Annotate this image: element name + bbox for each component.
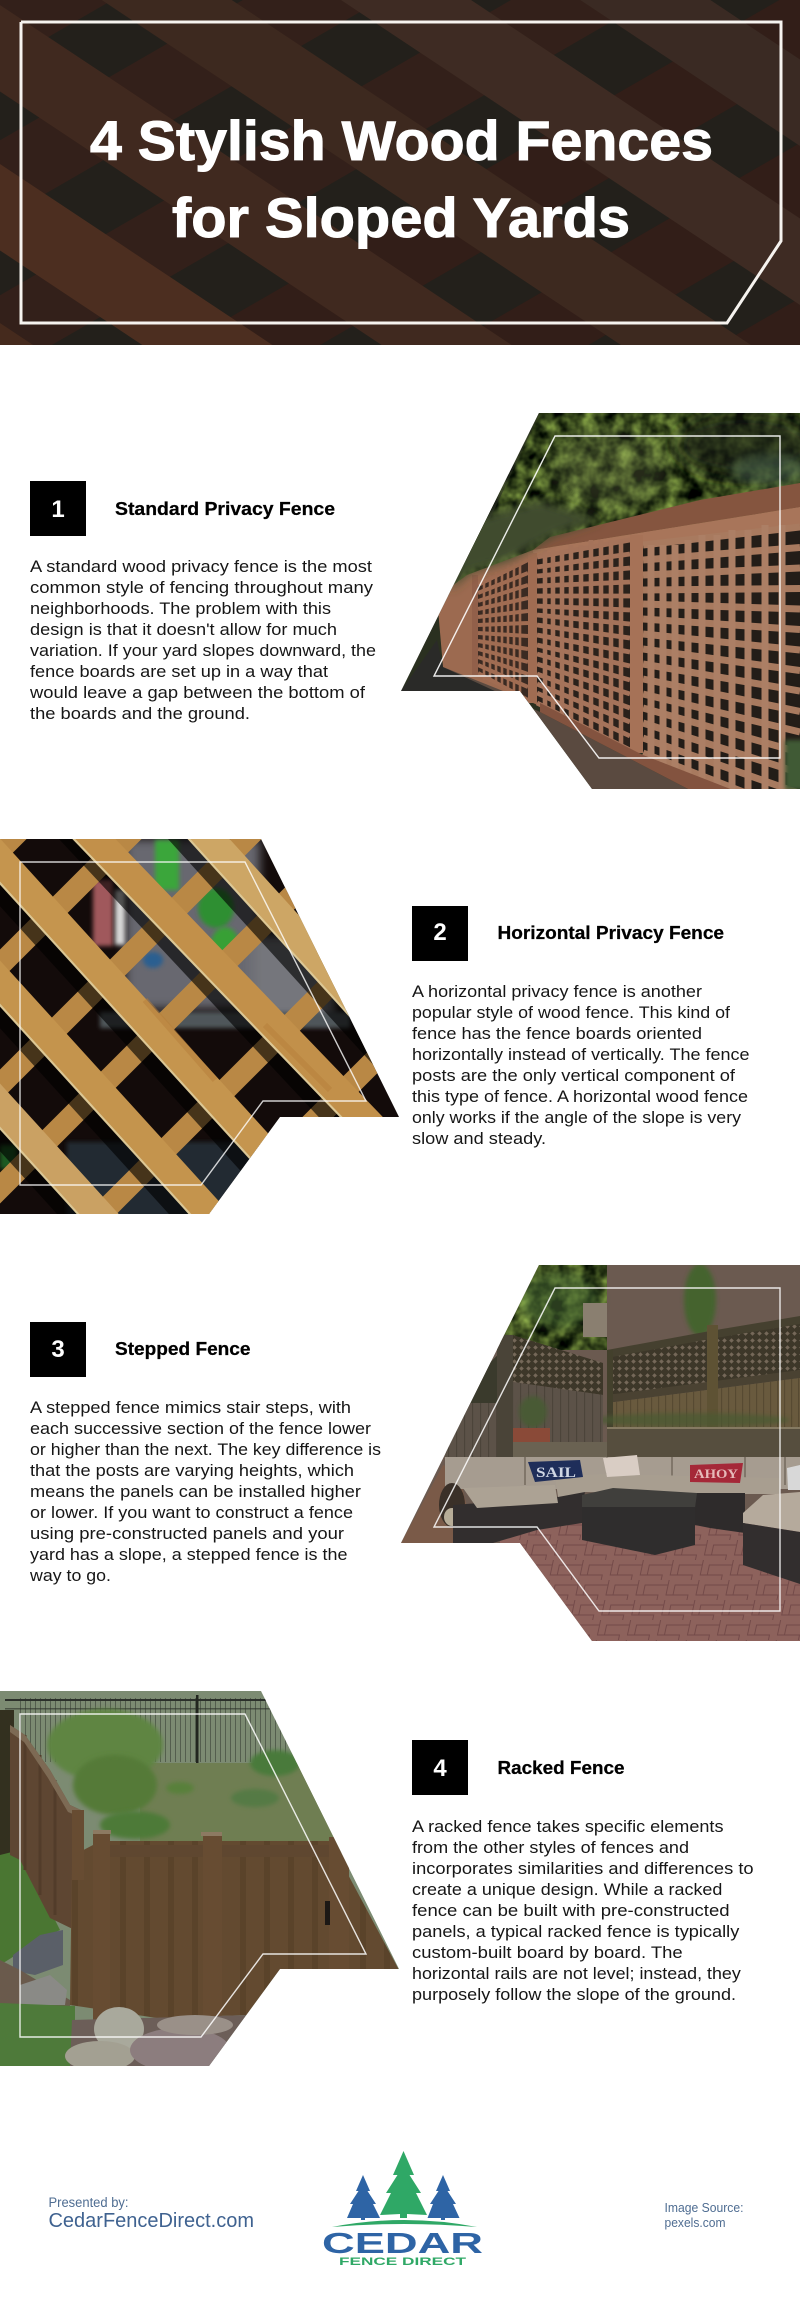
body text 3: way to go.: [30, 1567, 111, 1585]
presented by credit: Presented by:: [48, 2195, 128, 2210]
body text 1: fence boards are set up in a way that: [30, 663, 328, 681]
body text 4: A racked fence takes specific elements: [412, 1818, 724, 1836]
photo: lattice fence with foliage: [401, 413, 800, 789]
body text 1: would leave a gap between the bottom of: [30, 684, 365, 702]
header frame with chamfered corner: [20, 20, 782, 324]
body text 2: A horizontal privacy fence is another: [412, 983, 703, 1001]
body text 2: slow and steady.: [412, 1130, 546, 1148]
image source credit: [664, 2201, 744, 2230]
body text 4: incorporates similarities and differences to: [412, 1860, 754, 1878]
body text 3: or lower. If you want to construct a fence: [30, 1504, 353, 1522]
title: for Sloped Yards: [172, 186, 630, 249]
number badge 2: [412, 906, 468, 961]
presented by credit: CedarFenceDirect.com: [48, 2210, 254, 2232]
panel: section 2 horizontal privacy fence: [0, 839, 750, 1214]
body text 3: each successive section of the fence lower: [30, 1420, 372, 1438]
number badge 2: 2: [433, 919, 447, 946]
number badge 3: 3: [51, 1336, 65, 1363]
title: 4 Stylish Wood Fences: [90, 109, 713, 172]
body text 4: purposely follow the slope of the ground.: [412, 1986, 736, 2004]
number badge 1: [30, 481, 86, 536]
photo: patio with sofa and stepped fence: SAIL: [536, 1465, 576, 1481]
body text 4: create a unique design. While a racked: [412, 1881, 722, 1899]
body text 2: horizontally instead of vertically. The fence: [412, 1046, 750, 1064]
body text 4: horizontal rails are not level; instead, they: [412, 1965, 742, 1983]
icon: green ground arc: [332, 2220, 477, 2227]
photo: patio with sofa and stepped fence: AHOY: [694, 1466, 739, 1481]
body text 4: from the other styles of fences and: [412, 1839, 689, 1857]
body text 2: popular style of wood fence. This kind of: [412, 1004, 730, 1022]
body text 3: that the posts are varying heights, which: [30, 1462, 354, 1480]
photo: patio with sofa and stepped fence: [401, 1265, 800, 1641]
heading: racked fence: Racked Fence: [498, 1758, 624, 1778]
number badge 1: 1: [51, 496, 65, 523]
body text 1: variation. If your yard slopes downward, the: [30, 642, 376, 660]
body text 3: yard has a slope, a stepped fence is the: [30, 1546, 348, 1564]
heading: standard privacy fence: Standard Privacy Fence: [115, 499, 335, 519]
body text 3: [30, 1399, 381, 1585]
photo: brown racked fence in yard: [0, 1691, 399, 2066]
logo: cedar fence direct: [322, 2151, 483, 2268]
body text 1: neighborhoods. The problem with this: [30, 600, 331, 618]
body text 3: using pre-constructed panels and your: [30, 1525, 345, 1543]
body text 3: A stepped fence mimics stair steps, with: [30, 1399, 351, 1417]
icon: left blue tree: [347, 2175, 380, 2220]
presented by credit: [48, 2195, 254, 2232]
logo tagline: FENCE DIRECT: [339, 2256, 466, 2268]
header banner: [0, 0, 800, 345]
icon: right blue tree: [428, 2175, 460, 2220]
heading: stepped fence: Stepped Fence: [115, 1339, 250, 1359]
body text 2: fence has the fence boards oriented: [412, 1025, 702, 1043]
icon: center green tree: [380, 2151, 427, 2218]
panel: section 1 standard privacy fence: [30, 413, 800, 789]
body text 1: common style of fencing throughout many: [30, 579, 374, 597]
body text 4: [412, 1818, 754, 2004]
body text 3: means the panels can be installed higher: [30, 1483, 362, 1501]
panel: section 3 stepped fence: [30, 1265, 800, 1641]
footer: [48, 2151, 744, 2268]
body text 4: fence can be built with pre-constructed: [412, 1902, 730, 1920]
logo wordmark: CEDAR: [322, 2228, 483, 2260]
body text 2: this type of fence. A horizontal wood fence: [412, 1088, 748, 1106]
title: [90, 109, 713, 249]
image source credit: pexels.com: [664, 2216, 726, 2230]
body text 1: A standard wood privacy fence is the most: [30, 558, 372, 576]
body text 2: only works if the angle of the slope is very: [412, 1109, 742, 1127]
image source credit: Image Source:: [664, 2201, 744, 2215]
body text 2: [412, 983, 750, 1148]
body text 1: design is that it doesn't allow for much: [30, 621, 337, 639]
header photo: dark wood lattice: [0, 0, 800, 345]
body text 1: [30, 558, 376, 723]
number badge 3: [30, 1322, 86, 1377]
body text 2: posts are the only vertical component of: [412, 1067, 735, 1085]
body text 3: or higher than the next. The key difference is: [30, 1441, 381, 1459]
body text 4: custom-built board by board. The: [412, 1944, 683, 1962]
heading: horizontal privacy fence: Horizontal Privacy Fence: [498, 923, 724, 943]
photo: wooden diagonal lattice: [0, 839, 399, 1214]
body text 1: the boards and the ground.: [30, 705, 250, 723]
panel: section 4 racked fence: [0, 1691, 754, 2066]
number badge 4: 4: [433, 1755, 447, 1782]
number badge 4: [412, 1740, 468, 1795]
body text 4: panels, a typical racked fence is typically: [412, 1923, 740, 1941]
